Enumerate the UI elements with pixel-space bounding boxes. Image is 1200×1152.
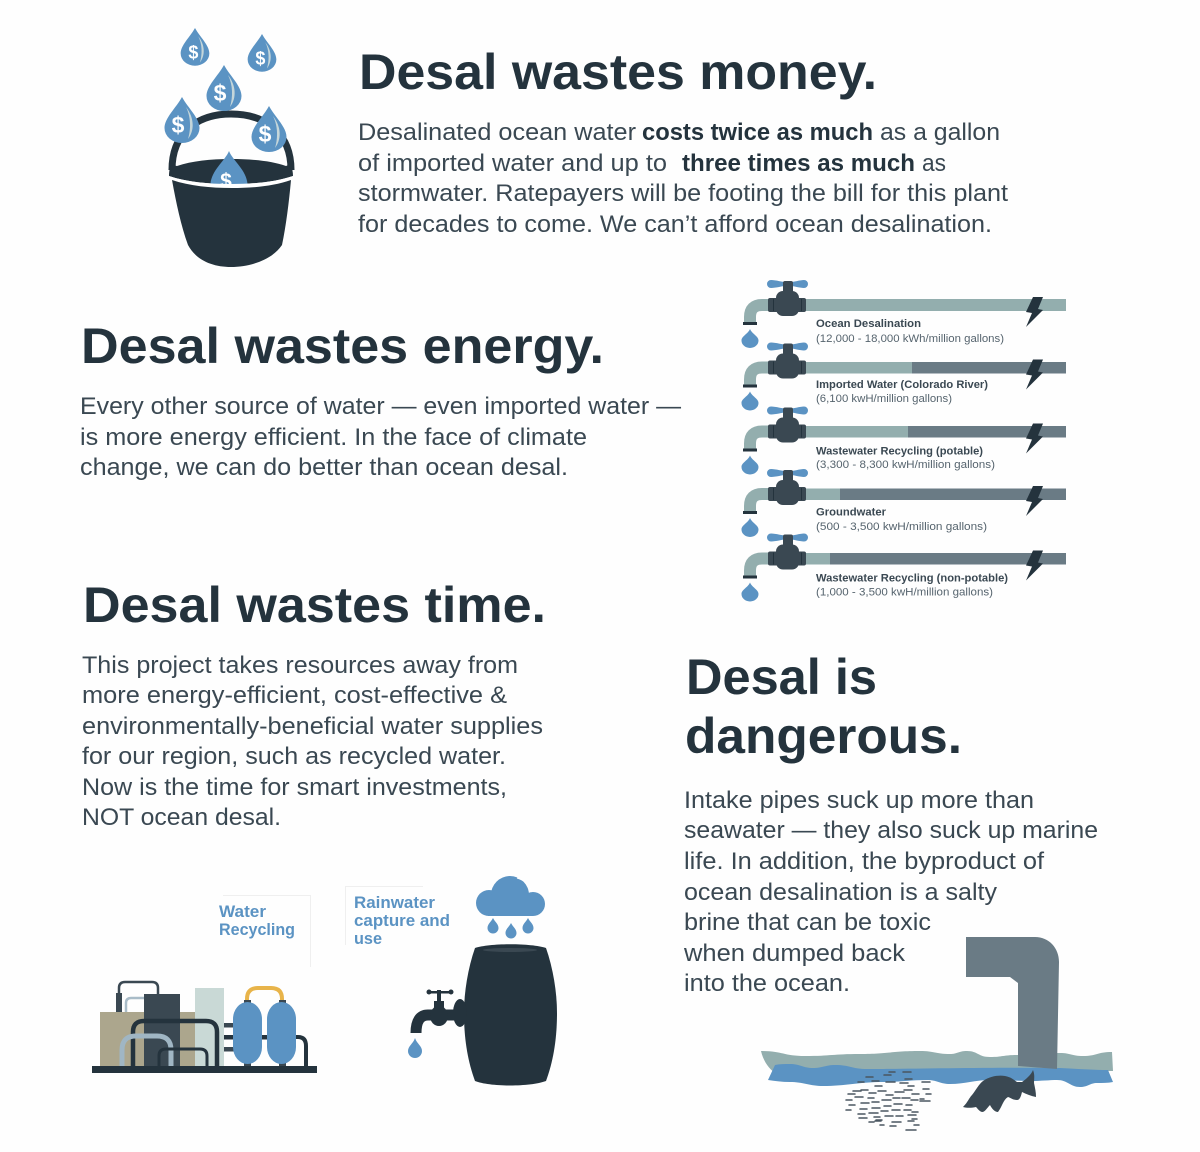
text block: time: This project takes resources away from [82, 652, 518, 679]
text block: money: of imported water and up to [358, 150, 667, 177]
icon: bucket with dollar drops [164, 28, 293, 267]
icon: drop 3: $ [214, 80, 227, 106]
text block: energy: is more energy efficient. In the face of climate [80, 424, 587, 451]
text block: dangerous: brine that can be toxic [684, 909, 931, 936]
text block: time: NOT ocean desal. [82, 804, 281, 831]
text block: energy: change, we can do better than ocean desal. [80, 454, 568, 481]
text block: dangerous: into the ocean. [684, 970, 850, 997]
icon: drop 1: $ [188, 42, 198, 62]
icon: drop 1 [181, 28, 209, 66]
heading: time: Desal wastes time. [83, 577, 546, 633]
icon: rain cloud [476, 876, 545, 938]
pipe row: groundwater: (500 - 3,500 kwH/million gallons) [816, 521, 987, 533]
heading: dangerous: dangerous. [685, 708, 962, 764]
pipe row: ocean desalination [742, 280, 1066, 348]
label: water recycling [219, 896, 310, 967]
icon: drop 5 [252, 106, 286, 152]
label: rainwater capture [346, 886, 450, 948]
text block: money: as [922, 150, 946, 177]
pipe row: groundwater [742, 469, 1066, 537]
pipe row: ocean desalination: Ocean Desalination [816, 318, 921, 330]
pipe row: wastewater recycling potable: Wastewater Recycling (potable) [816, 446, 983, 458]
icon: drop in bucket: $ [220, 170, 232, 193]
icon: drop 4 [164, 97, 200, 143]
text block: time: environmentally-beneficial water supplies [82, 713, 543, 740]
text block: money: Desalinated ocean water [358, 119, 636, 146]
icon: drop 2 [248, 34, 276, 72]
text block: time: more energy-efficient, cost-effective & [82, 682, 507, 709]
text block: energy [80, 393, 681, 481]
text block: dangerous: when dumped back [683, 940, 906, 967]
icon: drop 5: $ [259, 121, 272, 147]
icon: outfall pipe [966, 937, 1059, 1069]
text block: money: for decades to come. We can’t afford ocean desalination. [358, 211, 992, 238]
text block: dangerous [683, 787, 1098, 997]
text block: time: Now is the time for smart investments, [82, 774, 507, 801]
pipe row: imported water: Imported Water (Colorado River) [816, 379, 988, 391]
heading: dangerous [685, 649, 962, 764]
pipe row: wastewater recycling non-potable: Wastewater Recycling (non-potable) [816, 572, 1008, 584]
icon: drop 4: $ [172, 112, 185, 138]
icon: drop in bucket [210, 151, 248, 193]
pipe row: wastewater recycling non-potable: (1,000 - 3,500 kwH/million gallons) [816, 586, 993, 598]
text block: time [82, 652, 543, 831]
text block: dangerous: ocean desalination is a salty [684, 879, 997, 906]
pipe row: wastewater recycling non-potable [742, 534, 1066, 602]
icon: large fish [963, 1070, 1036, 1112]
icon: drop 2: $ [255, 48, 265, 68]
icon: school of small fish [846, 1072, 931, 1130]
pipe row: wastewater recycling potable: (3,300 - 8,300 kwH/million gallons) [816, 459, 995, 471]
chart: energy use per water source [742, 280, 1066, 602]
label: water recycling: Recycling [219, 920, 295, 939]
text block: time: for our region, such as recycled water. [82, 743, 506, 770]
text block: money: as a gallon [880, 119, 1000, 146]
pipe row: wastewater recycling potable [742, 406, 1066, 475]
pipe row: ocean desalination: (12,000 - 18,000 kWh/million gallons) [816, 333, 1004, 345]
text block: money: three times as much [682, 150, 915, 177]
heading: money: Desal wastes money. [359, 44, 877, 100]
pipe row: imported water: (6,100 kwH/million gallons) [816, 393, 952, 405]
icon: ocean water [761, 1051, 1113, 1087]
text block: dangerous: Intake pipes suck up more than [684, 787, 1034, 814]
heading: dangerous: Desal is [686, 649, 877, 705]
pipe row: imported water [742, 342, 1066, 411]
label: rainwater capture: capture and [354, 911, 450, 930]
text block: money: costs twice as much [642, 119, 873, 146]
text block: money [358, 119, 1008, 238]
icon: rain barrel with tap [408, 944, 557, 1086]
icon: water recycling plant [92, 982, 317, 1073]
text block: money: stormwater. Ratepayers will be footing the bill for this plant [358, 180, 1008, 207]
text block: dangerous: life. In addition, the byproduct of [684, 848, 1044, 875]
pipe row: groundwater: Groundwater [816, 506, 887, 518]
icon: drop 3 [206, 65, 242, 111]
label: rainwater capture: Rainwater [354, 893, 435, 912]
heading: energy: Desal wastes energy. [81, 318, 604, 374]
text block: dangerous: seawater — they also suck up marine [684, 817, 1098, 844]
label: water recycling: Water [219, 902, 266, 921]
label: rainwater capture: use [354, 929, 382, 948]
text block: energy: Every other source of water — even imported water — [80, 393, 681, 420]
icon: tap drop [408, 1038, 422, 1058]
